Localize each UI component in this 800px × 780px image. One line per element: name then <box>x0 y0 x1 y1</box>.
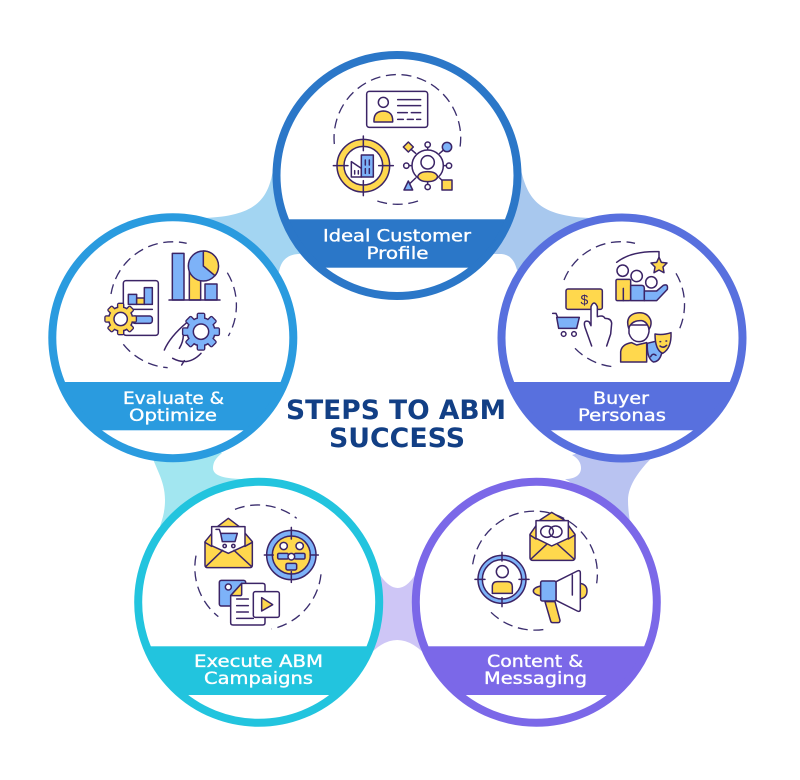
panel: Execute ABM Campaigns <box>132 480 386 724</box>
icon: buyer personas: $ <box>580 291 588 307</box>
label: Buyer Personas: Personas <box>578 406 666 426</box>
title: SUCCESS <box>329 423 465 454</box>
label: Content & Messaging <box>484 652 587 689</box>
label: Buyer Personas <box>578 389 666 426</box>
label: Ideal Customer Profile: Ideal Customer <box>323 227 471 247</box>
connector: content to campaigns <box>365 575 430 660</box>
label: Execute ABM Campaigns <box>194 652 323 689</box>
label: Evaluate & Optimize <box>123 389 224 426</box>
label: Ideal Customer Profile: Profile <box>366 244 428 264</box>
label: Ideal Customer Profile <box>323 227 471 264</box>
panel: Buyer Personas <box>495 216 749 460</box>
panel: Evaluate & Optimize <box>46 216 300 460</box>
icon: buyer personas <box>553 242 685 367</box>
icon: evaluate and optimize <box>105 242 236 368</box>
label: Content & Messaging: Content & <box>487 652 583 672</box>
title <box>286 395 506 454</box>
label: Execute ABM Campaigns: Execute ABM <box>194 652 323 672</box>
title: STEPS TO ABM <box>286 395 506 426</box>
connector: campaigns to optimize <box>150 440 245 526</box>
icon: customer profile <box>333 75 461 204</box>
connector: optimize to profile <box>205 170 300 272</box>
panel: Content & Messaging <box>409 480 663 724</box>
label: Evaluate & Optimize: Optimize <box>129 406 217 426</box>
label: Execute ABM Campaigns: Campaigns <box>204 669 313 689</box>
icon: content and messaging <box>473 511 597 630</box>
label: Content & Messaging: Messaging <box>484 669 587 689</box>
label: Evaluate & Optimize: Evaluate & <box>123 389 224 409</box>
connector: profile to personas <box>490 170 590 270</box>
label: Buyer Personas: Buyer <box>593 389 649 409</box>
connector: personas to content <box>565 440 660 522</box>
icon: execute campaigns <box>195 505 321 629</box>
panel: Ideal Customer Profile <box>270 54 524 298</box>
